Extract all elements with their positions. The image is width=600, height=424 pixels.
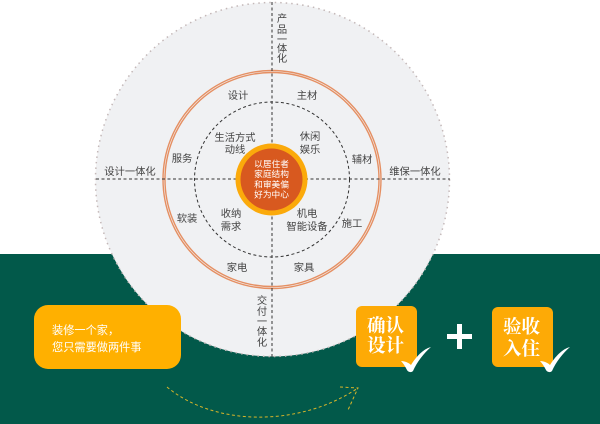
accept and move in box: [492, 307, 570, 372]
axis label: delivery: 一: [257, 317, 267, 328]
outer pale circle: [96, 2, 450, 356]
ring labels: 主材: [297, 89, 317, 102]
ring labels: 家具: [294, 261, 314, 274]
axis label: design: 设计一体化: [104, 165, 156, 178]
callout: 装修一个家，: [52, 323, 119, 337]
axis label: product: 体: [277, 43, 288, 55]
accept and move in box: 验收: [503, 317, 540, 338]
ring labels: 施工: [342, 217, 362, 230]
inner labels: 生活方式: [214, 131, 256, 144]
inner labels: 收纳: [221, 207, 241, 220]
callout: [34, 305, 181, 369]
inner labels: 娱乐: [300, 143, 320, 156]
axis label: product: 一: [277, 35, 287, 46]
callout: 您只需要做两件事: [52, 340, 142, 354]
axis label: maintenance: 维保一体化: [389, 165, 441, 178]
center badge: 好为中心: [254, 188, 289, 200]
center badge: 和审美偏: [254, 178, 289, 190]
orange ring: [163, 70, 381, 288]
dashed arrow: [167, 387, 358, 417]
confirm design box: 设计: [367, 336, 404, 357]
center badge: [236, 144, 308, 216]
inner dashed circle: [194, 102, 350, 257]
inner labels: 机电: [297, 207, 317, 220]
axis label: delivery: 体: [257, 326, 268, 338]
ring labels: 设计: [228, 89, 248, 102]
center badge: 以居住者: [254, 158, 289, 169]
inner labels: [214, 130, 328, 233]
dashed axes: [96, 2, 450, 357]
axis label: delivery: 交: [257, 294, 267, 307]
icon: check: [401, 347, 431, 372]
axis label: product: [277, 12, 288, 65]
confirm design box: 确认: [367, 316, 404, 337]
axis label: delivery: [257, 294, 268, 349]
ring labels: 家电: [227, 261, 247, 274]
axis label: product: 化: [277, 52, 287, 65]
ring labels: 服务: [172, 152, 192, 165]
ring labels: 软装: [177, 212, 197, 225]
plus sign: [447, 324, 472, 349]
axis label: product: 产: [277, 12, 287, 25]
center badge: 家庭结构: [254, 168, 289, 179]
inner labels: 智能设备: [286, 220, 328, 233]
axis label: product: 品: [277, 24, 287, 36]
green background band: [0, 254, 600, 424]
ring labels: [172, 89, 372, 274]
icon: check: [540, 347, 570, 372]
confirm design box: [356, 306, 431, 372]
inner labels: 休闲: [300, 130, 320, 143]
axis label: delivery: 化: [257, 336, 267, 349]
inner labels: 需求: [221, 221, 241, 233]
circular diagram: [96, 2, 450, 357]
ring labels: 辅材: [352, 153, 372, 166]
axis label: delivery: 付: [257, 305, 267, 318]
accept and move in box: 入住: [503, 339, 540, 360]
inner labels: 动线: [225, 143, 245, 156]
